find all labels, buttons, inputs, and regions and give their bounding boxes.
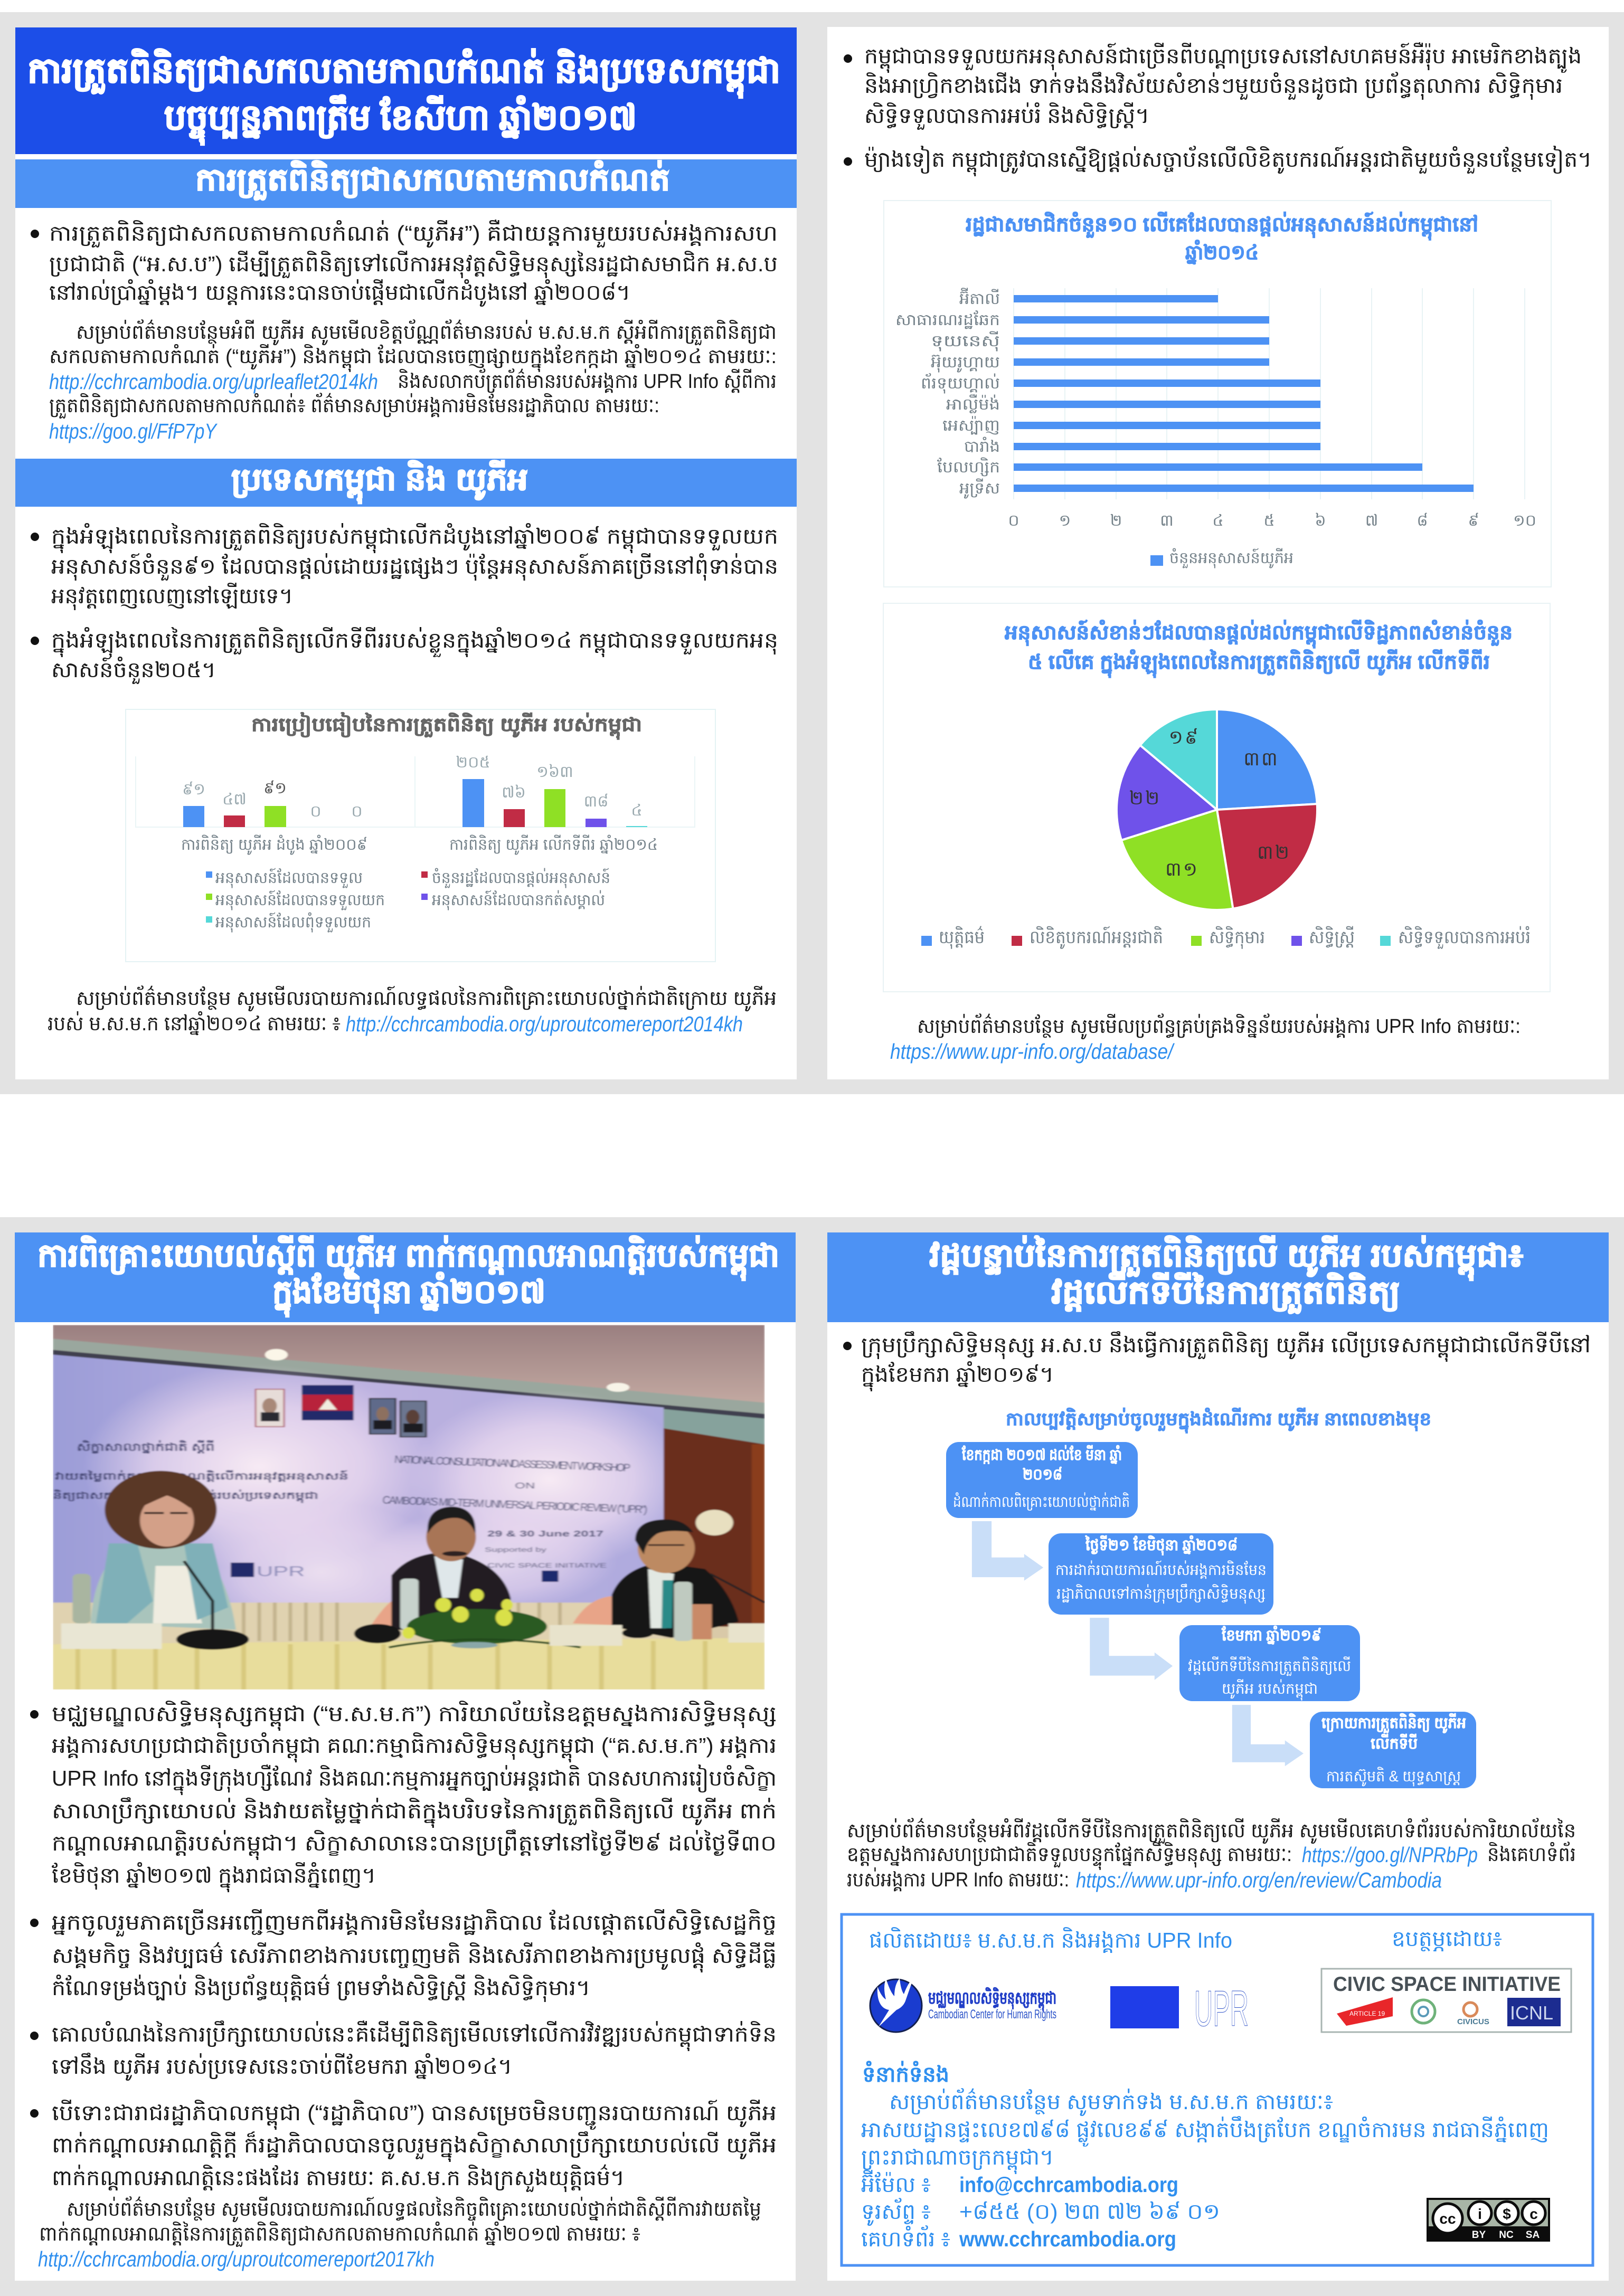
chart legend: អនុសាសន៍ដែលបានកត់សម្គាល់ — [432, 890, 605, 910]
value axis: ៩ — [1468, 512, 1479, 529]
arrow: step 1 to step 2 — [972, 1521, 1043, 1581]
text block: UPR Info database link: https://www.upr-info.org/database/ — [890, 1039, 1175, 1064]
logo: Civic Space Initiative: CIVIC SPACE INITIATIVE — [1333, 1973, 1561, 1996]
horizontal bars — [1014, 295, 1474, 492]
text block: government participation: បើទោះជារាជរដ្ឋាភិបាលកម្ពុជា (“រដ្ឋាភិបាល”) បានសម្រេចមិនបញ្ជូនរបាយការណ៍ យូភីអ — [52, 2099, 777, 2130]
contact details: ព្រះរាជាណាចក្រកម្ពុជា។ — [861, 2145, 1054, 2175]
text block: consultation organisers: កណ្តាលអាណត្តិរបស់កម្ពុជា។ សិក្ខាសាលានេះបានប្រព្រឹត្តទៅនៅថ្ងៃទី២៩ ដល់ថ្ងៃទី៣០ — [52, 1829, 777, 1861]
logo: UPR Info: UPR — [1194, 1980, 1249, 2037]
text block: 2014 report link: សម្រាប់ព័ត៌មានបន្ថែម សូមមើលរបាយការណ៍លទ្ធផលនៃការពិគ្រោះយោបល់ថ្នាក់ជាតិក្រោយ យូភីអ — [76, 985, 777, 1012]
chart legend — [206, 868, 610, 933]
bar value labels: ៩១ — [263, 780, 287, 797]
text block: recommendation themes: និងអាហ្វ្រិកខាងជើង ទាក់ទងនឹងវិស័យសំខាន់ៗមួយចំនួនដូចជា ប្រព័ន្ធតុលាការ សិទ្ធិកុមារ — [864, 71, 1563, 100]
text block: Cambodia recommendations: ក្នុងអំឡុងពេលនៃការត្រួតពិនិត្យរបស់កម្ពុជាលើកដំបូងនៅឆ្នាំ២០០៩ កម្ពុជាបានទទួលយក — [51, 523, 778, 554]
country labels: អ៊ុយរូហ្គាយ — [931, 354, 1000, 373]
contact details: សម្រាប់ព័ត៌មានបន្ថែម សូមទាក់ទង ម.ស.ម.ក តាមរយៈ៖ — [889, 2088, 1333, 2117]
country labels: អូទ្រីស — [959, 478, 1000, 499]
icon: Creative Commons licence badge: c — [1529, 2206, 1538, 2222]
bar value labels: ២០៥ — [456, 754, 490, 771]
woman — [91, 1543, 236, 1630]
text block: further information links — [49, 319, 777, 443]
bars: second review — [462, 779, 647, 827]
value axis: ២ — [1110, 512, 1122, 529]
pie legend: សិទ្ធិទទួលបានការអប់រំ — [1398, 926, 1531, 949]
category labels — [181, 834, 658, 855]
text block: consultation organisers: មជ្ឈមណ្ឌលសិទ្ធិមនុស្សកម្ពុជា (“ម.ស.ម.ក”) ការិយាល័យនៃឧត្តមស្នងការសិទ្ធិមនុស្ស — [52, 1700, 777, 1731]
heading: next steps and third cycle: វដ្តលើកទីបីនៃការត្រួតពិនិត្យ — [1051, 1272, 1400, 1314]
step 3 box: ខែមករា ឆ្នាំ២០១៩ — [1221, 1625, 1321, 1645]
step 3 box: វដ្តលើកទីបីនៃការត្រួតពិនិត្យលើ — [1188, 1656, 1351, 1676]
country labels: អេស្ប៉ាញ — [942, 416, 1000, 435]
text block: consultation aim — [30, 2020, 777, 2081]
photo: workshop panel of three speakers: សិក្ខាសាលាថ្នាក់ជាតិ ស្តីពី — [77, 1440, 215, 1454]
text block: 2014 report link: របស់ ម.ស.ម.ក នៅឆ្នាំ២០១៤ តាមរយៈ ៖ — [48, 1011, 341, 1036]
text block: Cambodia recommendations: អនុសាសន៍ចំនួន៩១ ដែលបានផ្តល់ដោយរដ្ឋផ្សេងៗ ប៉ុន្តែអនុសាសន៍ភាគច្រើននៅពុំទាន់បាន — [51, 553, 778, 581]
icon: Creative Commons licence badge: BY — [1472, 2229, 1486, 2241]
pie value labels: ៣៣ — [1243, 748, 1279, 770]
bar value labels: ១៦៣ — [536, 763, 573, 781]
step 4 box: ក្រោយការត្រួតពិនិត្យ យូភីអ — [1321, 1713, 1466, 1733]
bar chart: top 10 recommending states — [884, 201, 1551, 587]
value axis: ៣ — [1160, 512, 1174, 529]
value axis: ៤ — [1212, 512, 1224, 529]
flowers — [407, 1609, 547, 1644]
value axis: ៧ — [1365, 512, 1378, 529]
bar value labels: ៣៨ — [584, 793, 608, 810]
logo: Civic Space Initiative: ARTICLE 19 — [1349, 2010, 1385, 2017]
icon: Creative Commons licence badge: NC — [1499, 2229, 1514, 2241]
panel: next steps for Cambodia's UPR — [827, 1232, 1609, 2281]
step 2 box: ការដាក់របាយការណ៍របស់អង្គការមិនមែន — [1055, 1560, 1267, 1579]
step 1 box: ដំណាក់កាលពិគ្រោះយោបល់ថ្នាក់ជាតិ — [953, 1492, 1130, 1511]
text block: what the UPR is — [31, 219, 778, 307]
centre man — [391, 1553, 511, 1630]
heading: mid-term consultation June 2017: ក្នុងខែមិថុនា ឆ្នាំ២០១៧ — [272, 1272, 545, 1317]
value axis: ០ — [1008, 512, 1019, 529]
bars: first review — [183, 806, 286, 827]
value axis: ៨ — [1417, 512, 1428, 529]
text block: 2017 report link: http://cchrcambodia.org/uproutcomereport2017kh — [38, 2247, 435, 2271]
text block: UPR Info database link: សម្រាប់ព័ត៌មានបន្ថែម សូមមើលប្រព័ន្ធគ្រប់គ្រងទិន្នន័យរបស់អង្គការ UPR Info តាមរយៈ: — [917, 1013, 1521, 1040]
panel: mid-term UPR consultation — [15, 1232, 796, 2281]
chart legend: អនុសាសន៍ដែលបានទទួល — [215, 868, 363, 888]
contact details — [861, 2061, 1549, 2251]
contact details: info@cchrcambodia.org — [959, 2172, 1178, 2197]
contact details: ទំនាក់ទំនង — [862, 2061, 949, 2086]
country labels: បែលហ្សិក — [937, 457, 1000, 477]
photo: workshop panel of three speakers: ON — [515, 1482, 535, 1491]
heading: universal periodic review: ការត្រួតពិនិត្យជាសកលតាមកាលកំណត់ — [195, 160, 670, 201]
heading: next steps and third cycle — [827, 1232, 1609, 1322]
contact details: អាសយដ្ឋានផ្ទះលេខ៧៩៨ ផ្លូវលេខ៩៩ សង្កាត់បឹងត្របែក ខណ្ឌចំការមន រាជធានីភ្នំពេញ — [861, 2115, 1549, 2147]
text block: Cambodia recommendations: សាសន៍ចំនួន២០៥។ — [51, 656, 216, 685]
text block: consultation organisers: ខែមិថុនា ឆ្នាំ២០១៧ ក្នុងរាជធានីភ្នំពេញ។ — [52, 1862, 376, 1893]
value axis — [1008, 512, 1536, 529]
country labels: អាល្លឺម៉ង់ — [946, 394, 1000, 414]
text block: what the UPR is: នៅរាល់ប្រាំឆ្នាំម្តង។ យន្តការនេះបានចាប់ផ្តើមជាលើកដំបូងនៅ ឆ្នាំ២០០៨។ — [49, 279, 630, 307]
pie legend: សិទ្ធិស្ត្រី — [1309, 926, 1355, 948]
step 2 box: រដ្ឋាភិបាលទៅកាន់ក្រុមប្រឹក្សាសិទ្ធិមនុស្ស — [1056, 1583, 1266, 1604]
text block: further information links: សកលតាមកាលកំណត់ (“យូភីអ”) និងកម្ពុជា ដែលបានចេញផ្សាយក្នុងខែកក្កដា ឆ្នាំ២០១៤ តាមរយៈ: — [49, 344, 777, 372]
country labels — [895, 288, 1000, 499]
pie legend: លិខិតូបករណ៍អន្តរជាតិ — [1030, 926, 1163, 949]
step 1 box: ខែកក្កដា ២០១៧ ដល់ខែ មីនា ឆ្នាំ — [961, 1445, 1122, 1464]
panel: overview of the universal periodic review — [15, 27, 797, 1079]
value axis: ១ — [1059, 512, 1071, 529]
step 4 box — [1310, 1712, 1476, 1788]
produced by: ផលិតដោយ៖ ម.ស.ម.ក និងអង្គការ UPR Info — [869, 1927, 1232, 1953]
logo: Civic Space Initiative — [1321, 1969, 1571, 2032]
text block: what the UPR is: ការត្រួតពិនិត្យជាសកលតាមកាលកំណត់ (“យូភីអ”) គឺជាយន្តការមួយរបស់អង្គការសហ — [49, 219, 778, 248]
text block: consultation aim: ទៅនឹង យូភីអ របស់ប្រទេសនេះចាប់ពីខែមករា ឆ្នាំ២០១៤។ — [52, 2052, 512, 2081]
bar value labels: ០ — [351, 803, 363, 820]
chart title: អនុសាសន៍សំខាន់ៗដែលបានផ្តល់ដល់កម្ពុជាលើទិដ្ឋភាពសំខាន់ចំនួន — [1005, 620, 1513, 649]
step 1 box: ២០១៨ — [1023, 1466, 1062, 1483]
heading: universal periodic review — [15, 159, 797, 208]
text block: recommendation themes: ម៉្យាងទៀត កម្ពុជាត្រូវបានស្នើឱ្យផ្តល់សច្ចាប័នលើលិខិតូបករណ៍អន្តរជាតិមួយចំនួនបន្ថែមទៀត។ — [864, 145, 1592, 177]
photo: workshop panel of three speakers: និត្យជាសកល តាមកាលកំណត់របស់ប្រទេសកម្ពុជា — [53, 1489, 318, 1503]
text block: third cycle links: របស់អង្គការ UPR Info តាមរយៈ: — [847, 1867, 1069, 1892]
pie value labels: ១៩ — [1169, 726, 1200, 748]
contact details: www.cchrcambodia.org — [959, 2227, 1176, 2251]
text block: further information links: ត្រួតពិនិត្យជាសកលតាមកាលកំណត់៖ ព័ត៌មានសម្រាប់អង្គការមិនមែនរដ្ឋាភិបាល តាមរយៈ: — [49, 393, 659, 419]
bar chart: comparison of Cambodia's UPR reviews — [126, 709, 715, 962]
pie value labels: ៣១ — [1165, 858, 1199, 880]
step 2 box — [1049, 1533, 1273, 1615]
logo: Civic Space Initiative: ICNL — [1510, 2002, 1553, 2024]
icon: Creative Commons licence badge: i — [1478, 2206, 1482, 2222]
category labels: ការពិនិត្យ យូភីអ លើកទីពីរ ឆ្នាំ២០១៤ — [449, 834, 658, 855]
text block: recommendation themes: សិទ្ធិទទួលបានការអប់រំ និងសិទ្ធិស្ត្រី។ — [864, 102, 1149, 130]
text block: further information links: http://cchrcambodia.org/uprleaflet2014kh — [49, 369, 378, 394]
step 4 box: ការតស៊ូមតិ & យុទ្ធសាស្ត្រ — [1326, 1767, 1461, 1787]
logo: Civic Space Initiative: CIVICUS — [1457, 2017, 1489, 2026]
step 3 box — [1179, 1625, 1360, 1701]
text block: consultation organisers — [30, 1700, 777, 1893]
text block: government participation — [30, 2099, 777, 2193]
photo: workshop panel of three speakers: CIVIC SPACE INITIATIVE — [487, 1562, 607, 1569]
icon: Creative Commons licence badge: $ — [1503, 2206, 1511, 2222]
logo: UPR Info — [1110, 1980, 1249, 2037]
photo: workshop panel of three speakers: UPR — [257, 1563, 305, 1579]
text block: participants: កំណែទម្រង់ច្បាប់ និងប្រព័ន្ធយុត្តិធម៌ ព្រមទាំងសិទ្ធិស្ត្រី និងសិទ្ធិកុមារ។ — [52, 1974, 590, 2003]
chart title: ឆ្នាំ២០១៤ — [1185, 240, 1259, 264]
pie slices — [1117, 709, 1317, 910]
bar value labels: ៩១ — [182, 781, 205, 798]
icon: Creative Commons licence badge: cc — [1439, 2210, 1456, 2227]
chart legend: អនុសាសន៍ដែលបានទទួលយក — [215, 890, 385, 910]
panel: recommendations to Cambodia — [827, 27, 1609, 1079]
text block: government participation: ពាក់កណ្តាលអាណត្តិនេះផងដែរ តាមរយៈ គ.ស.ម.ក និងក្រសួងយុត្តិធម៌។ — [52, 2164, 625, 2193]
logo: CCHR: មជ្ឈមណ្ឌលសិទ្ធិមនុស្សកម្ពុជា — [928, 1987, 1056, 2012]
bar value labels: ៧៦ — [502, 784, 526, 801]
timeline title: កាលប្បវត្តិសម្រាប់ចូលរួមក្នុងដំណើរការ យូភីអ នាពេលខាងមុខ — [1006, 1408, 1431, 1434]
photo: workshop panel of three speakers: 29 & 30 June 2017 — [487, 1529, 603, 1539]
chart title — [1005, 620, 1513, 678]
contact details: ទូរស័ព្ទ ៖ — [861, 2198, 931, 2226]
photo: workshop panel of three speakers: CAMBODIA'S MID-TERM UNIVERSAL PERIODIC REVIEW ("UPR") — [382, 1494, 648, 1516]
timeline flow diagram — [946, 1408, 1476, 1788]
bar value labels: ០ — [310, 803, 322, 820]
country labels: ទុយនេស៊ី — [931, 331, 1000, 352]
chart legend: ចំនួនរដ្ឋដែលបានផ្តល់អនុសាសន៍ — [432, 868, 610, 888]
chart title: រដ្ឋជាសមាជិកចំនួន១០ លើគេដែលបានផ្តល់អនុសាសន៍ដល់កម្ពុជានៅ — [966, 212, 1478, 241]
country labels: បារាំង — [964, 437, 1000, 456]
photo: workshop panel of three speakers: វាយតម្លៃពាក់កណ្តាលអាណត្តិលើការអនុវត្តអនុសាសន៍ — [55, 1470, 348, 1483]
heading: mid-term consultation June 2017: ការពិគ្រោះយោបល់ស្តីពី យូភីអ ពាក់កណ្តាលអាណត្តិរបស់កម្ពុជា — [37, 1235, 779, 1281]
text block: recommendation themes: កម្ពុជាបានទទួលយកអនុសាសន៍ជាច្រើនពីបណ្តាប្រទេសនៅសហគមន៍អឺរ៉ុប អាមេរិកខាងត្បូង — [864, 42, 1582, 73]
category labels: ការពិនិត្យ យូភីអ ដំបូង ឆ្នាំ២០០៩ — [181, 834, 367, 855]
photo: workshop panel of three speakers: NATIONAL CONSULTATION AND ASSESSMENT WORKSHOP — [394, 1453, 631, 1474]
value axis: ៦ — [1315, 512, 1326, 529]
text block: participants: អ្នកចូលរួមភាគច្រើនអញ្ជើញមកពីអង្គការមិនមែនរដ្ឋាភិបាល ដែលផ្តោតលើសិទ្ធិសេដ្ឋកិច្ច — [52, 1909, 777, 1937]
value axis: ៥ — [1263, 512, 1275, 529]
country labels: អ៊ីតាលី — [959, 288, 1000, 308]
value axis: ១០ — [1513, 512, 1536, 529]
pie legend: យុត្តិធម៌ — [939, 926, 985, 949]
bar value labels: ៤៧ — [222, 791, 247, 808]
text block: 2014 report link: http://cchrcambodia.org/uproutcomereport2014kh — [346, 1012, 743, 1036]
step 4 box: លើកទីបី — [1371, 1733, 1418, 1752]
contact details: គេហទំព័រ ៖ — [861, 2225, 950, 2251]
logo: CCHR — [870, 1978, 1056, 2032]
right man — [612, 1563, 739, 1638]
text block: Cambodia recommendations: ក្នុងអំឡុងពេលនៃការត្រួតពិនិត្យលើកទីពីររបស់ខ្លួនក្នុងឆ្នាំ២០១៤ កម្ពុជាបានទទួលយកអនុ — [51, 627, 778, 658]
pie legend — [921, 926, 1531, 949]
chart title — [966, 212, 1478, 264]
photo: workshop panel of three speakers — [53, 1325, 764, 1690]
text block: consultation organisers: សាលាប្រឹក្សាយោបល់ និងវាយតម្លៃថ្នាក់ជាតិក្នុងបរិបទនៃការត្រួតពិនិត្យលើ យូភីអ ពាក់ — [52, 1797, 777, 1828]
text block: third cycle links: សម្រាប់ព័ត៌មានបន្ថែមអំពីវដ្តលើកទីបីនៃការត្រួតពិនិត្យលើ យូភីអ សូមមើលគេហទំព័ររបស់ការិយាល័យនៃ — [847, 1818, 1576, 1844]
contact details: +៨៥៥ (០) ២៣ ៧២ ៦៩ ០១ — [959, 2199, 1220, 2224]
text block: 2014 report link — [48, 985, 777, 1036]
text block: participants: សង្គមកិច្ច និងវប្បធម៌ សេរីភាពខាងការបញ្ចេញមតិ និងសេរីភាពខាងការប្រមូលផ្តុំ សិទ្ធិដីធ្លី — [52, 1942, 777, 1973]
chart legend: ចំនួនអនុសាសន៍យូភីអ — [1169, 548, 1293, 568]
text block: third cycle links: https://goo.gl/NPRbPp — [1302, 1843, 1478, 1867]
text block: third cycle links: និងគេហទំព័រ — [1487, 1842, 1576, 1866]
icon: Creative Commons licence badge — [1427, 2198, 1550, 2242]
country labels: ព័រទុយហ្គាល់ — [921, 373, 1000, 394]
step 1 box — [946, 1442, 1138, 1518]
text block: 2017 report link: ពាក់កណ្តាលអាណត្តិនៃការត្រួតពិនិត្យជាសកលតាមកាលកំណត់ ឆ្នាំ២០១៧ តាមរយៈ ៖ — [39, 2221, 640, 2247]
text block: Cambodia recommendations — [31, 523, 778, 685]
pie value labels: ៣២ — [1257, 841, 1291, 863]
main title banner: បច្ចុប្បន្នភាពត្រឹម ខែសីហា ឆ្នាំ២០១៧ — [164, 94, 637, 146]
text block: Cambodia recommendations: អនុវត្តពេញលេញនៅឡើយទេ។ — [51, 582, 293, 611]
text block: third review date — [843, 1331, 1591, 1392]
heading: Cambodia and the UPR — [15, 459, 797, 507]
pie value labels: ២២ — [1129, 787, 1161, 809]
text block: consultation aim: គោលបំណងនៃការប្រឹក្សាយោបល់នេះគឺដើម្បីពិនិត្យមើលទៅលើការវិវឌ្ឍរបស់កម្ពុជាទាក់ទិន — [52, 2020, 777, 2052]
text block: government participation: ពាក់កណ្តាលអាណត្តិក្តី ក៏រដ្ឋាភិបាលបានចូលរួមក្នុងសិក្ខាសាលាប្រឹក្សាយោបល់លើ យូភីអ — [52, 2131, 777, 2162]
panel: credits and contact — [842, 1914, 1593, 2265]
text block: consultation organisers: អង្គការសហប្រជាជាតិប្រចាំកម្ពុជា គណៈកម្មាធិការសិទ្ធិមនុស្សកម្ពុជា (“គ.ស.ម.ក”) អង្គការ — [52, 1732, 777, 1763]
photo: workshop panel of three speakers: Supported by — [485, 1547, 547, 1553]
pie chart: key recommendations by theme — [883, 603, 1550, 992]
text block: what the UPR is: ប្រជាជាតិ (“អ.ស.ប”) ដើម្បីត្រួតពិនិត្យទៅលើការអនុវត្តសិទ្ធិមនុស្សនៃរដ្ឋជាសមាជិក អ.ស.ប — [49, 250, 778, 279]
pie legend: សិទ្ធិកុមារ — [1209, 926, 1265, 949]
text block: third cycle links: https://www.upr-info.org/en/review/Cambodia — [1076, 1868, 1442, 1892]
text block: consultation organisers: UPR Info នៅក្នុងទីក្រុងហ្សឺណែវ និងគណៈកម្មការអ្នកច្បាប់អន្តរជាតិ បានសហការរៀបចំសិក្ខា — [52, 1764, 777, 1796]
bar value labels: ៤ — [631, 802, 643, 819]
text block: third cycle links — [847, 1818, 1576, 1892]
main title banner: ការត្រួតពិនិត្យជាសកលតាមកាលកំណត់ និងប្រទេសកម្ពុជា — [27, 49, 780, 99]
text block: recommendation themes — [844, 42, 1592, 177]
text block: further information links: សម្រាប់ព័ត៌មានបន្ថែមអំពី យូភីអ សូមមើលខិត្តប័ណ្ណព័ត៌មានរបស់ ម.ស.ម.ក ស្តីអំពីការត្រួតពិនិត្យជា — [76, 319, 777, 346]
arrow: step 3 to step 4 — [1232, 1705, 1304, 1766]
text block: UPR Info database link — [890, 1013, 1521, 1064]
arrow: step 2 to step 3 — [1090, 1618, 1173, 1680]
chart title: ការប្រៀបធៀបនៃការត្រួតពិនិត្យ យូភីអ របស់កម្ពុជា — [251, 712, 642, 740]
logo: CCHR: Cambodian Center for Human Rights — [928, 2007, 1056, 2022]
heading: next steps and third cycle: វដ្តបន្ទាប់នៃការត្រួតពិនិត្យលើ យូភីអ របស់កម្ពុជា៖ — [929, 1235, 1523, 1281]
icon: Creative Commons licence badge: SA — [1526, 2229, 1540, 2241]
step 2 box: ថ្ងៃទី២១ ខែមិថុនា ឆ្នាំ២០១៨ — [1085, 1535, 1238, 1555]
pie value labels — [1129, 726, 1291, 880]
step 3 box: យូភីអ របស់កម្ពុជា — [1222, 1679, 1318, 1701]
chart title: ៥ លើគេ ក្នុងអំឡុងពេលនៃការត្រួតពិនិត្យលើ យូភីអ លើកទីពីរ — [1028, 649, 1490, 678]
text block: further information links: https://goo.gl/FfP7pY — [49, 419, 218, 443]
country labels: សាធារណរដ្ឋឆែក — [895, 310, 1000, 329]
text block: third cycle links: ឧត្តមស្នងការសហប្រជាជាតិទទួលបន្ទុកផ្នែកសិទ្ធិមនុស្ស តាមរយៈ: — [847, 1842, 1292, 1870]
text block: 2017 report link — [38, 2196, 761, 2271]
text block: participants — [30, 1909, 777, 2003]
main title banner — [15, 27, 797, 154]
heading: Cambodia and the UPR: ប្រទេសកម្ពុជា និង យូភីអ — [231, 460, 528, 504]
bar value labels — [182, 754, 643, 820]
text block: third review date: ក្រុមប្រឹក្សាសិទ្ធិមនុស្ស អ.ស.ប នឹងធ្វើការត្រួតពិនិត្យ យូភីអ លើប្រទេសកម្ពុជាជាលើកទីបីនៅ — [861, 1331, 1591, 1362]
contact details: អ៊ីម៉ែល ៖ — [861, 2169, 931, 2197]
heading: mid-term consultation June 2017 — [15, 1232, 796, 1322]
text block: 2017 report link: សម្រាប់ព័ត៌មានបន្ថែម សូមមើលរបាយការណ៍លទ្ធផលនៃកិច្ចពិគ្រោះយោបល់ថ្នាក់ជាតិស្តីពីការវាយតម្លៃ — [67, 2196, 761, 2223]
chart legend: អនុសាសន៍ដែលពុំទទួលយក — [215, 912, 371, 933]
text block: further information links: និងសលាកប័ត្រព័ត៌មានរបស់អង្គការ UPR Info ស្តីពីការ — [398, 368, 777, 393]
supported by: ឧបត្ថម្ភដោយ៖ — [1392, 1927, 1502, 1952]
text block: third review date: ក្នុងខែមករា ឆ្នាំ២០១៩។ — [861, 1361, 1054, 1392]
